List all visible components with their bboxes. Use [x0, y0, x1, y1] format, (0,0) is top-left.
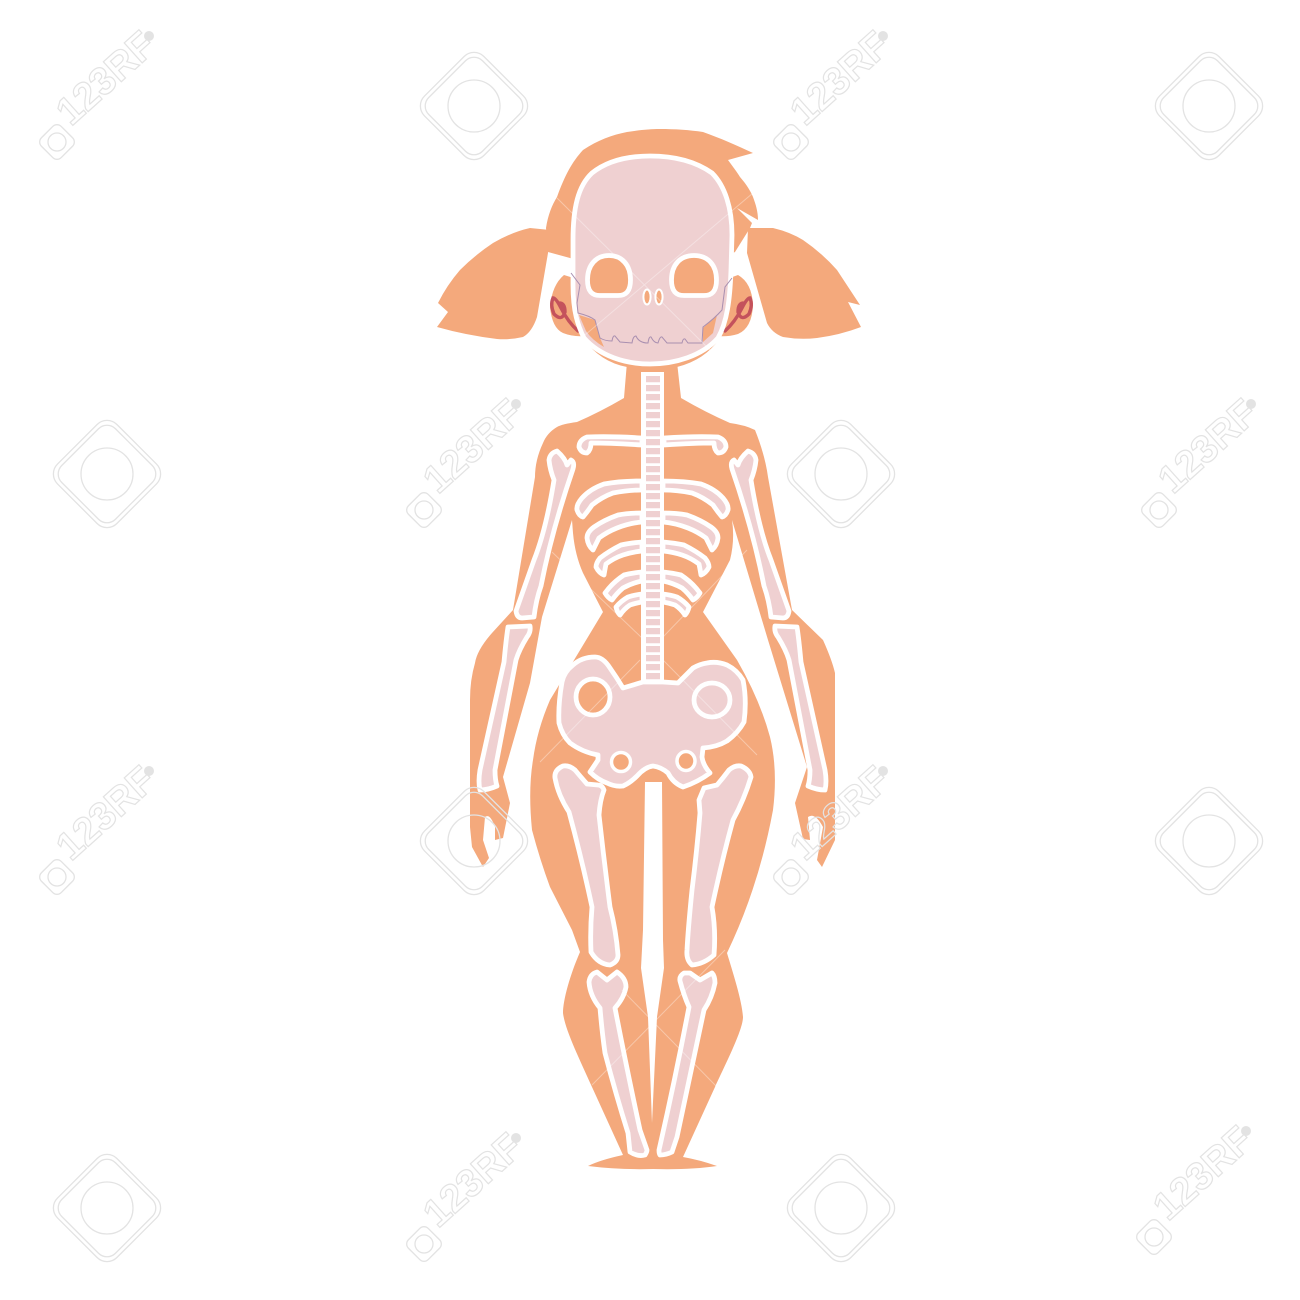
right clavicle — [664, 437, 726, 453]
figure — [437, 129, 861, 1169]
logo watermark 7: 123RF — [415, 1125, 531, 1236]
right forearm — [775, 626, 826, 790]
left eye socket — [588, 256, 630, 296]
left humerus — [516, 451, 574, 618]
body silhouette — [470, 362, 835, 1169]
jaw and teeth line — [571, 273, 732, 343]
spine — [641, 372, 664, 684]
logo watermark 2: 123RF — [782, 23, 898, 134]
hair cap — [546, 129, 758, 270]
skull — [573, 156, 732, 364]
left tibia — [589, 972, 647, 1156]
egg icon watermark 3 — [48, 415, 166, 533]
logo watermark 8: 123RF — [1145, 1118, 1261, 1229]
pelvis left opening — [576, 679, 610, 715]
logo watermark 1: 123RF — [48, 23, 164, 134]
face outline — [572, 160, 734, 367]
egg icon watermark 8 — [782, 1149, 900, 1267]
egg icon watermark 2 — [1150, 47, 1268, 165]
right ear — [718, 275, 753, 336]
logo watermark 3: 123RF — [415, 391, 531, 502]
jaw shading right — [703, 315, 717, 342]
egg icon watermark 5 — [415, 782, 533, 900]
egg icon watermark 7 — [48, 1149, 166, 1267]
right ribs — [663, 481, 728, 615]
right tibia — [659, 973, 715, 1155]
left pigtail — [437, 228, 550, 339]
right humerus — [731, 451, 789, 618]
pelvis — [559, 657, 745, 787]
logo watermark 6: 123RF — [782, 758, 898, 869]
left arm bones — [479, 451, 574, 790]
left clavicle — [579, 437, 642, 453]
left nostril — [643, 290, 651, 304]
egg icon watermark 6 — [1150, 782, 1268, 900]
jaw shading left — [579, 315, 604, 347]
egg icon watermark 4 — [782, 415, 900, 533]
logo watermark 5: 123RF — [48, 758, 164, 869]
logo watermark 4: 123RF — [1150, 391, 1266, 502]
right pigtail — [747, 228, 861, 339]
left ribs — [577, 481, 642, 615]
right eye socket — [672, 256, 716, 296]
left forearm — [479, 626, 530, 790]
pelvis right opening — [694, 683, 730, 717]
left femur — [555, 766, 618, 965]
pelvis lower right opening — [677, 752, 695, 770]
egg icon watermark 1 — [415, 47, 533, 165]
pelvis lower left opening — [612, 752, 630, 772]
right nostril — [655, 290, 663, 304]
left ear — [550, 275, 585, 336]
right arm bones — [731, 451, 826, 790]
right femur — [687, 766, 751, 965]
watermark lines over figure — [540, 193, 757, 1087]
